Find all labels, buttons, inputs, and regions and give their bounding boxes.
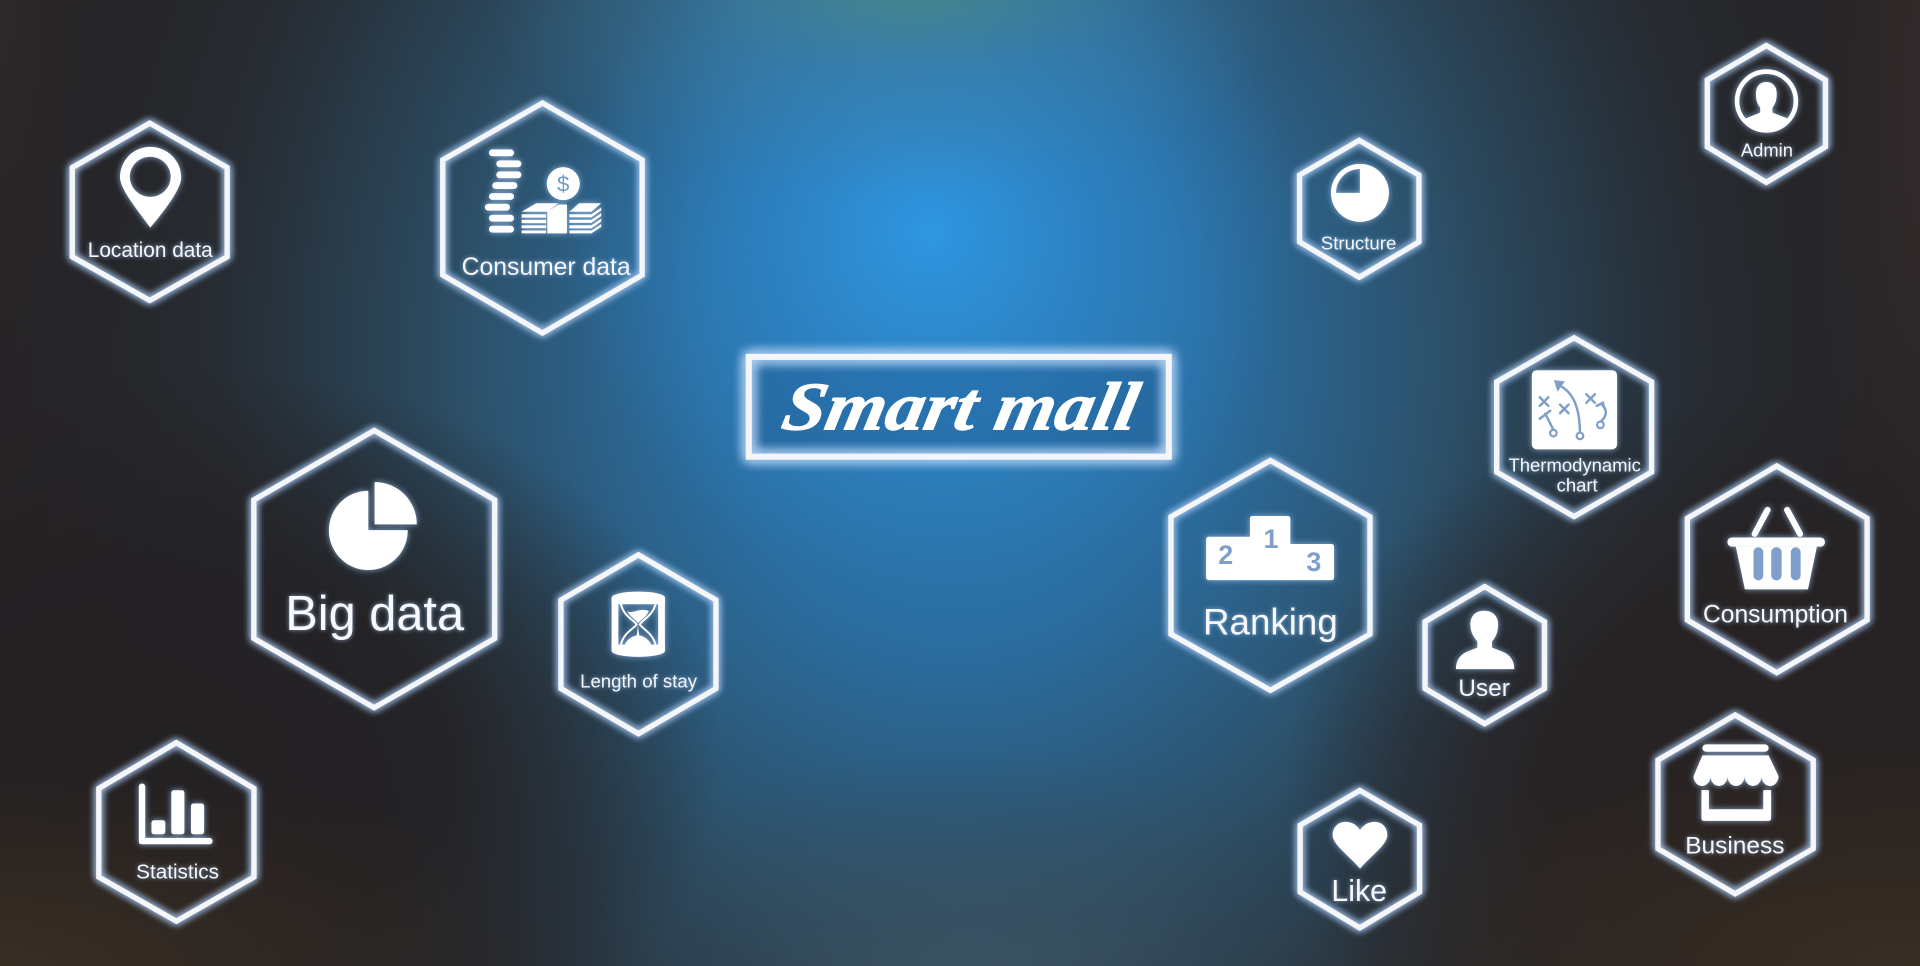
icon: coins and banknotes bbox=[485, 149, 601, 233]
icon: heart bbox=[1333, 822, 1387, 869]
hexagon: Like bbox=[1300, 790, 1420, 928]
label: Location data bbox=[88, 239, 213, 262]
label: User bbox=[1458, 675, 1510, 702]
label: Consumption bbox=[1703, 602, 1848, 629]
hexagon: Ranking bbox=[1171, 460, 1370, 690]
label: Consumer data bbox=[462, 254, 631, 281]
icon: hourglass bbox=[612, 592, 665, 657]
icon: podium: 1 bbox=[1264, 524, 1279, 554]
icon: storefront bbox=[1693, 744, 1779, 821]
icon: admin avatar bbox=[1737, 72, 1796, 130]
hexagon: Thermodynamic chart bbox=[1497, 338, 1652, 517]
label: Length of stay bbox=[580, 670, 698, 691]
label: Structure bbox=[1321, 233, 1396, 254]
hexagon: Big data bbox=[254, 430, 495, 708]
label: Like bbox=[1331, 875, 1387, 908]
icon: tactic board bbox=[1532, 370, 1617, 449]
icon: podium bbox=[1206, 516, 1334, 580]
label: Ranking bbox=[1203, 602, 1338, 643]
hexagon: Consumption bbox=[1687, 466, 1867, 673]
label second line: chart bbox=[1557, 474, 1598, 495]
icon: pie with quarter cut bbox=[1331, 164, 1389, 222]
hexagon: Business bbox=[1658, 715, 1813, 894]
hexagon: Statistics bbox=[99, 743, 254, 921]
hexagon: Structure bbox=[1300, 140, 1419, 277]
label: Statistics bbox=[136, 861, 219, 884]
title box: Smart mall bbox=[749, 357, 1169, 457]
icon: coins and banknotes: $ bbox=[557, 172, 569, 197]
icon: location pin bbox=[120, 147, 181, 228]
hexagon: Location data bbox=[72, 123, 227, 300]
hexagon: User bbox=[1425, 587, 1544, 724]
icon: pie chart bbox=[329, 482, 417, 570]
icon: podium: 2 bbox=[1218, 540, 1233, 570]
title frame bbox=[749, 357, 1169, 457]
hexagon: Admin bbox=[1707, 46, 1825, 182]
label: Thermodynamic bbox=[1508, 454, 1641, 475]
title text: Smart mall bbox=[777, 368, 1147, 445]
label: Business bbox=[1685, 832, 1785, 859]
hexagon: Length of stay bbox=[561, 555, 716, 734]
label: Big data bbox=[285, 587, 465, 641]
hexagon: Consumer data bbox=[443, 103, 642, 333]
icon: shopping basket bbox=[1727, 510, 1825, 589]
icon: podium: 3 bbox=[1306, 547, 1321, 577]
icon: user bust bbox=[1456, 611, 1514, 669]
icon: bar chart bbox=[139, 783, 213, 844]
label: Admin bbox=[1741, 139, 1793, 160]
